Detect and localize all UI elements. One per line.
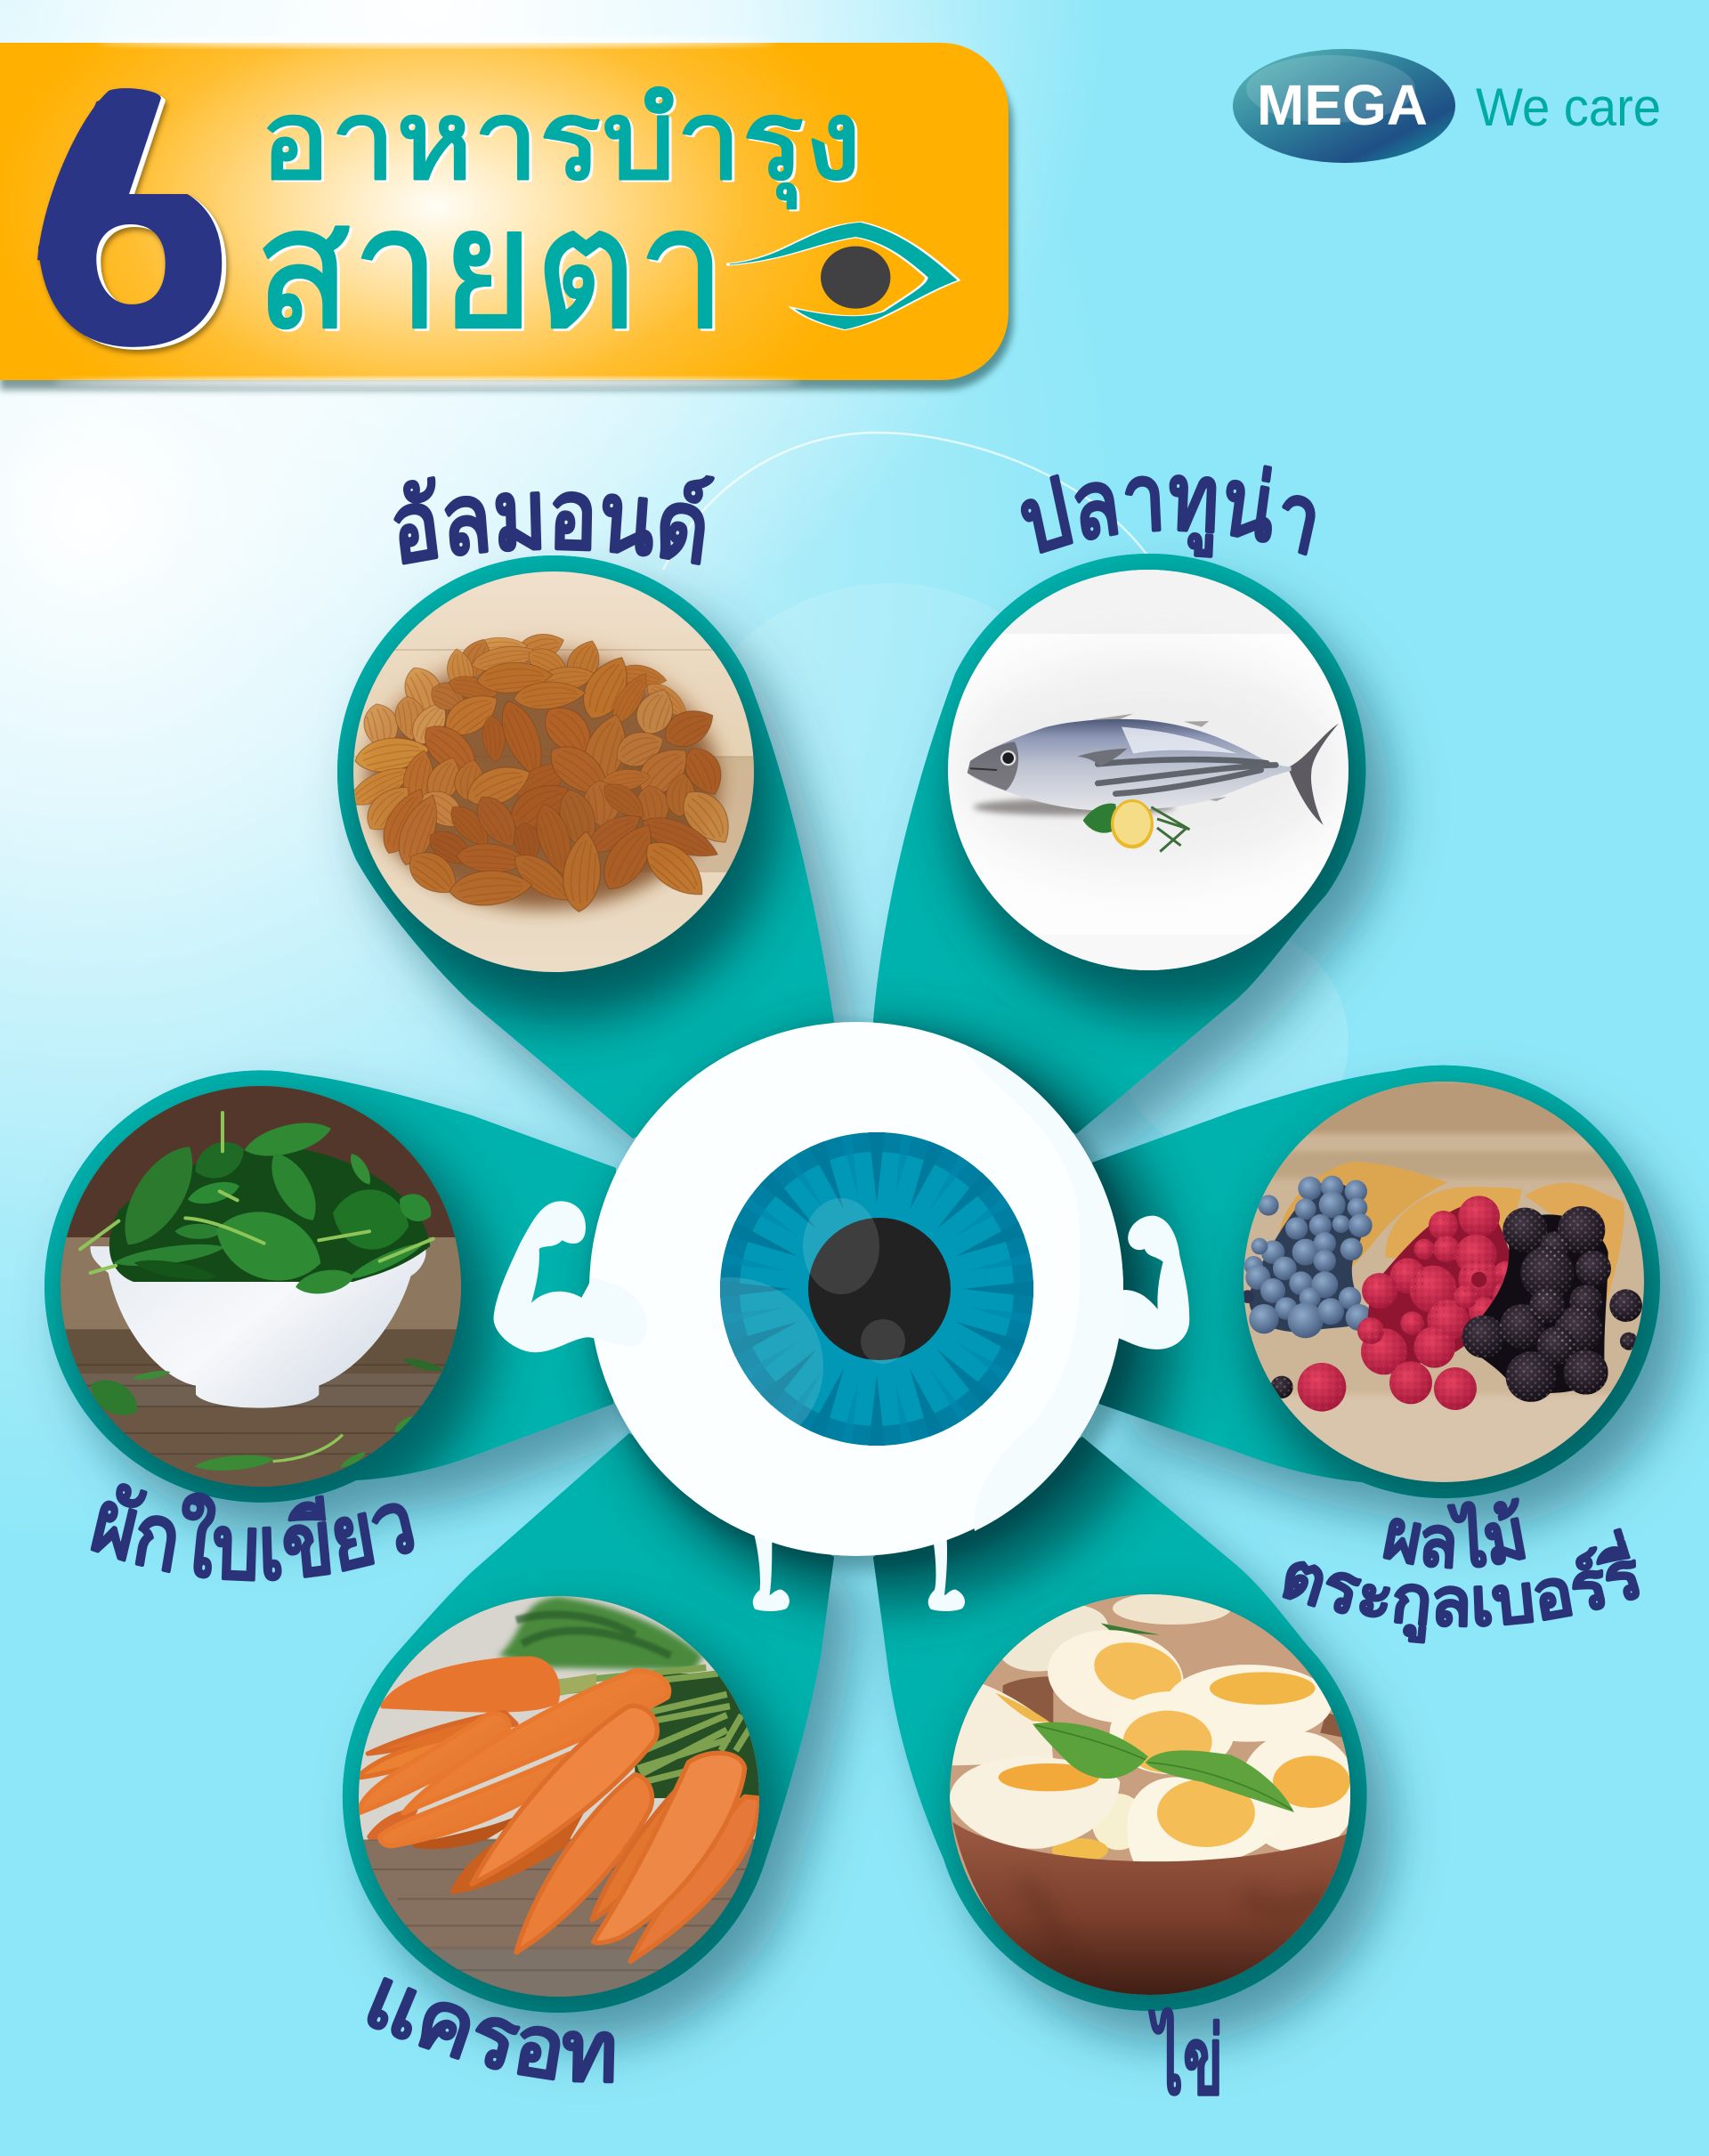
logo: We care xyxy=(1476,77,1661,137)
title line 1: อาหารบำรุง xyxy=(260,77,862,208)
arm: left xyxy=(493,1201,647,1352)
icon: title eye xyxy=(728,222,960,330)
label: fruit line 1: ผลไม้ xyxy=(1383,1497,1526,1569)
arm: right xyxy=(1116,1216,1189,1350)
label: berry line 2: ตระกูลเบอร์รี่ xyxy=(1282,1528,1640,1643)
eyeball xyxy=(589,1022,1123,1556)
number 6 xyxy=(36,88,231,356)
photo: berries xyxy=(1243,1082,1644,1482)
pupil xyxy=(808,1218,951,1360)
iris xyxy=(720,1132,1033,1446)
eye character xyxy=(493,1022,1189,1611)
photo: tuna xyxy=(948,570,1349,970)
logo: MEGA xyxy=(1257,73,1428,137)
number 6: 6 xyxy=(27,25,232,415)
leg: right xyxy=(928,1540,965,1611)
title banner xyxy=(0,25,1013,415)
flower petals xyxy=(0,445,1709,2047)
title line 2: สายตา xyxy=(255,173,726,364)
photo: almonds xyxy=(343,571,757,972)
label: carrots: แครอท xyxy=(367,1977,614,2083)
photo: carrots xyxy=(359,1596,759,1997)
label: eggs: ไข่ xyxy=(1148,2006,1219,2096)
label: tuna: ปลาทูน่า xyxy=(1020,465,1316,558)
logo xyxy=(1233,49,1661,163)
label: green leafy vegetables: ผักใบเขียว xyxy=(91,1483,415,1582)
label: almonds: อัลมอนด์ xyxy=(393,475,715,565)
photo: eggs xyxy=(949,1592,1357,1997)
pupil highlights xyxy=(803,1198,905,1364)
photo: spinach xyxy=(61,1086,461,1487)
leg: left xyxy=(753,1534,790,1611)
